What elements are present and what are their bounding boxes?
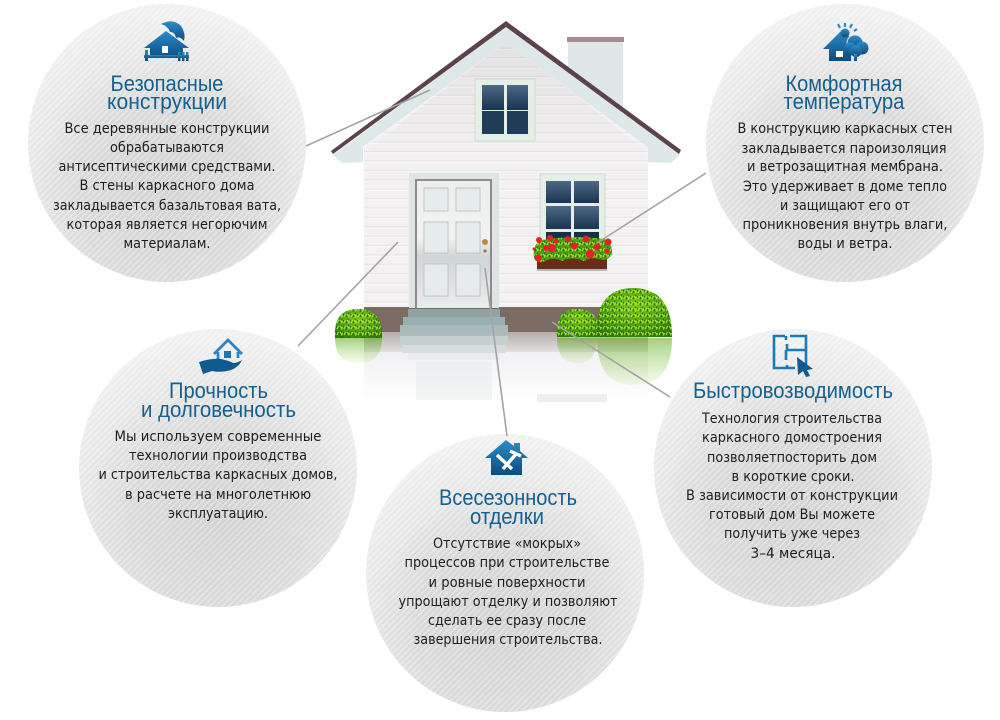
heading: конструкции — [107, 89, 227, 114]
house illustration — [331, 21, 681, 402]
body text: получить уже через — [724, 526, 860, 542]
body text: эксплуатацию. — [168, 506, 268, 522]
heading: и долговечность — [141, 397, 296, 422]
heading: Прочность — [169, 378, 268, 403]
connector lines — [298, 90, 706, 436]
roof fascia — [333, 27, 680, 163]
heading: температура — [784, 89, 905, 114]
icon: house with sun and tree — [823, 23, 868, 61]
body text: упрощают отделку и позволяют — [398, 594, 618, 610]
bush reflections — [335, 338, 672, 385]
flower box — [532, 235, 612, 271]
body text: позволяетпосторить дом — [707, 450, 877, 466]
body text: в короткие сроки. — [732, 469, 854, 485]
body text: в расчете на многолетнюю — [125, 487, 311, 503]
body text: закладывается пароизоляция — [742, 141, 946, 157]
body text — [738, 121, 952, 252]
body text: и защищают его от — [780, 198, 910, 214]
body text: 3–4 месяца. — [750, 546, 836, 562]
panel: comfortable temperature — [738, 23, 952, 252]
attic window — [475, 79, 535, 141]
door — [409, 173, 499, 308]
body text: сделать ее сразу после — [428, 613, 586, 629]
heading: Комфортная — [786, 71, 902, 96]
gable shadow — [362, 43, 650, 165]
icon: house on a hand — [199, 340, 242, 374]
body text: Технология строительства — [701, 411, 882, 427]
body text: воды и ветра. — [798, 236, 892, 252]
body text: и строительства каркасных домов, — [98, 467, 338, 483]
heading — [784, 71, 905, 114]
heading: Быстровозводимость — [693, 378, 893, 403]
body text: Отсутствие «мокрых» — [433, 536, 581, 552]
side window — [540, 174, 605, 242]
panel: safe constructions — [53, 21, 281, 252]
left bush — [335, 309, 382, 338]
body text — [686, 411, 898, 562]
body text: Мы используем современные — [114, 429, 322, 445]
body text: процессов при строительстве — [404, 555, 610, 571]
body text: В конструкцию каркасных стен — [738, 121, 952, 137]
icon: house with tools — [485, 440, 528, 475]
entrance steps — [400, 309, 508, 360]
heading — [141, 378, 296, 422]
right bushes — [557, 288, 672, 337]
icon: house with umbrella — [144, 21, 189, 61]
body text: завершения строительства. — [414, 632, 602, 648]
body text: готовый дом Вы можете — [709, 507, 875, 523]
body text: Все деревянные конструкции — [64, 121, 270, 137]
basement — [364, 307, 648, 333]
chimney — [567, 37, 624, 111]
ground reflection — [364, 332, 648, 402]
panel: all-season finishing — [398, 440, 618, 648]
body text: закладывается базальтовая вата, — [53, 198, 281, 214]
body text: антисептическими средствами. — [58, 159, 276, 175]
heading: отделки — [470, 504, 544, 529]
house wall with siding — [364, 43, 648, 308]
body text: В стены каркасного дома — [80, 178, 254, 194]
heading: Всесезонность — [439, 485, 577, 510]
body text: и ровные поверхности — [428, 575, 586, 591]
roof covering — [331, 21, 681, 154]
heading: Безопасные — [110, 71, 224, 96]
body text: каркасного домостроения — [702, 430, 882, 446]
body text: материалам. — [124, 236, 210, 252]
body text: Это удерживает в доме тепло — [743, 179, 947, 195]
icon: floor plan with cursor — [774, 336, 813, 377]
body text — [398, 536, 618, 648]
body text: проникновения внутрь влаги, — [742, 217, 948, 233]
body text: В зависимости от конструкции — [686, 488, 898, 504]
panel: fast construction — [686, 336, 898, 562]
body text — [98, 429, 338, 522]
panel: strength and durability — [98, 340, 338, 522]
body text: обрабатываются — [110, 140, 224, 156]
body text: технологии производства — [129, 448, 307, 464]
body text: которая является негорючим — [66, 217, 268, 233]
body text — [53, 121, 281, 252]
heading — [439, 485, 577, 529]
heading — [107, 71, 227, 114]
body text: и ветрозащитная мембрана. — [747, 159, 943, 175]
